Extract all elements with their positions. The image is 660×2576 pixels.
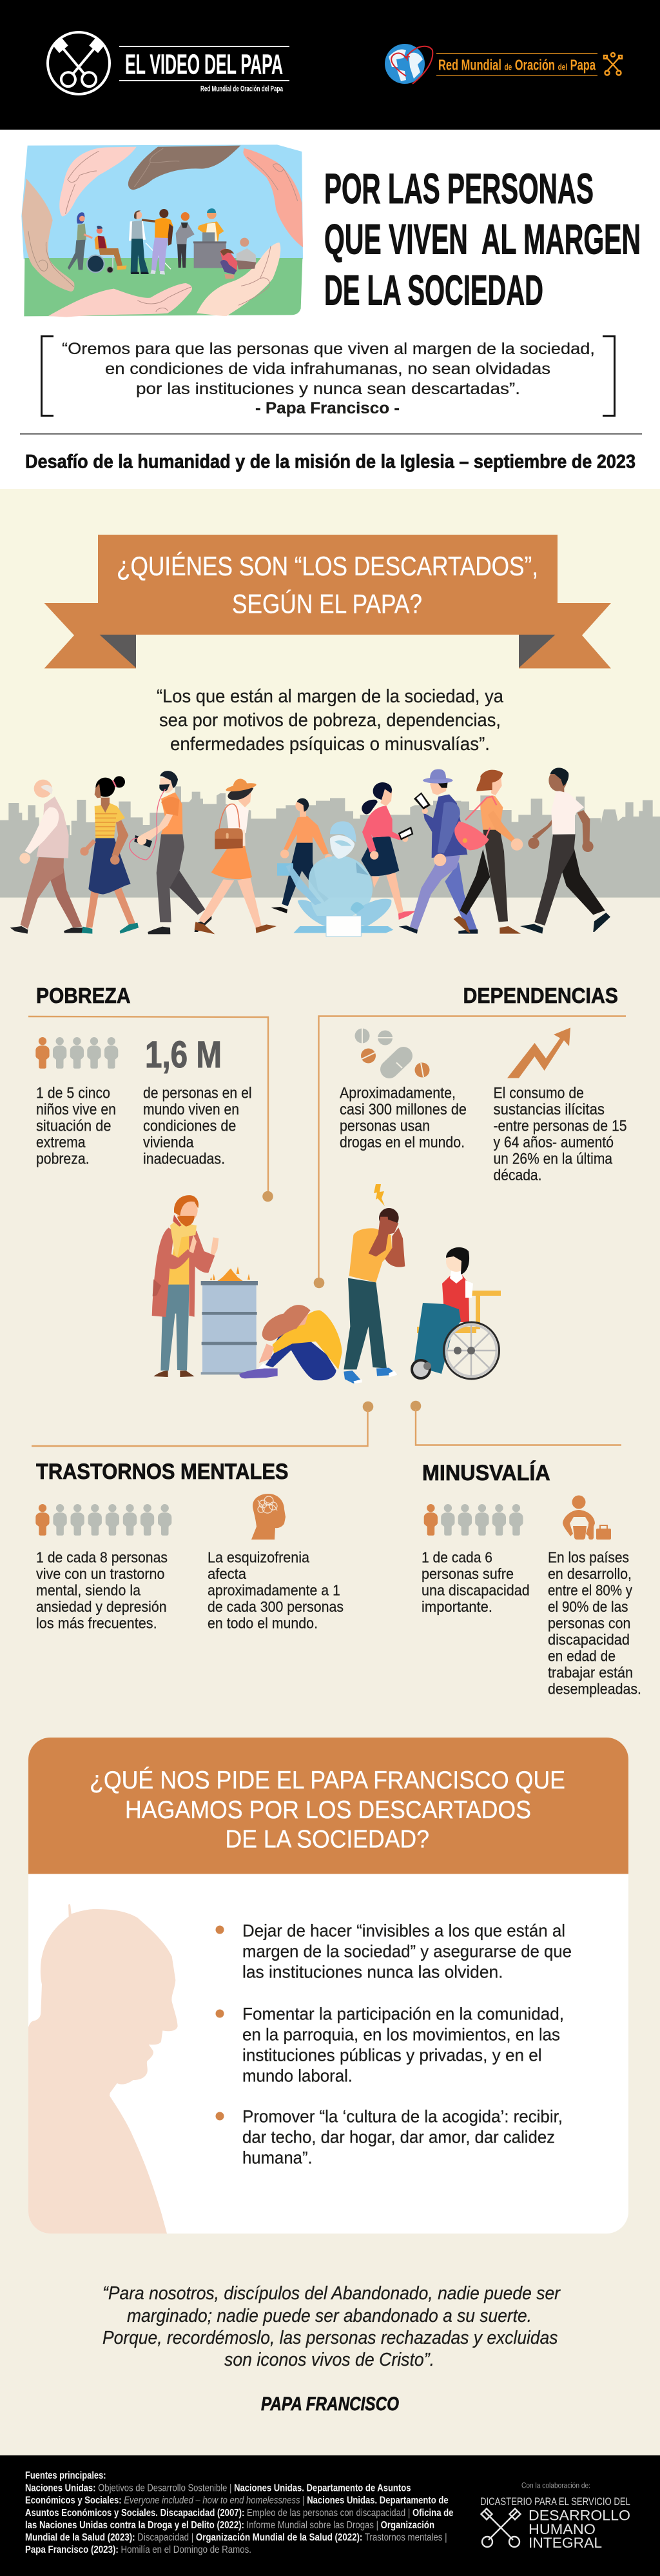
text: unemployment: discapacidad (548, 1631, 630, 1648)
walker: child (271, 798, 333, 913)
collaboration logo: Con la colaboración de: (521, 2481, 590, 2490)
walker: man in white shirt (520, 768, 610, 934)
logo wordmark: Red Mundial de Oración del Papa (200, 84, 283, 93)
bullet 2: Fomentar la participación en la comunidad, (242, 2005, 564, 2024)
text: unemployment: desempleadas. (548, 1681, 641, 1698)
section: Minusvalía (411, 1401, 641, 1698)
text: housing: de personas en el (143, 1085, 252, 1102)
text: housing: vivienda (143, 1134, 194, 1151)
text: 1 in 6: personas sufre (422, 1565, 514, 1582)
bullet 3: humana”. (242, 2148, 313, 2168)
text: unemployment: en edad de (548, 1648, 616, 1665)
bullet 3 (215, 2107, 563, 2168)
bullet 1: Dejar de hacer “invisibles a los que están al (242, 1921, 565, 1940)
quote: who are the discarded: enfermedades psíquicas o minusvalías”. (170, 734, 490, 755)
heading: Pobreza: POBREZA (36, 984, 130, 1007)
text: children in poverty: extrema (36, 1134, 86, 1151)
panel header (28, 1738, 628, 1874)
text: children in poverty (36, 1085, 116, 1168)
panel: what the Pope asks (28, 1738, 628, 2236)
icon: 1 in 6 people (424, 1504, 523, 1536)
connector line: Dependencias (314, 1016, 626, 1288)
text: schizophrenia: La esquizofrenia (208, 1549, 310, 1566)
connector line: Minusvalía (411, 1401, 621, 1445)
quote: who are the discarded: sea por motivos de pobreza, dependencias, (159, 710, 501, 731)
heading: Trastornos mentales: TRASTORNOS MENTALES (36, 1460, 289, 1484)
heading: what the Pope asks: ¿QUÉ NOS PIDE EL PAPA FRANCISCO QUE (90, 1767, 565, 1794)
stat: 1,6 M: 1,6 M (145, 1034, 222, 1076)
text: housing: condiciones de (143, 1118, 236, 1135)
divider (20, 433, 642, 435)
walker: woman with bun (80, 776, 139, 934)
quote: who are the discarded (157, 686, 503, 755)
title (324, 164, 641, 314)
figure: blind man with cane (129, 210, 171, 274)
collaboration logo (480, 2481, 630, 2551)
ribbon heading: ¿QUIÉNES SON “LOS DESCARTADOS”, (117, 551, 538, 581)
logo: El Video del Papa keys (48, 32, 110, 94)
bullet 1 (215, 1921, 572, 1982)
header band (0, 0, 660, 130)
text: 1 in 8: los más frecuentes. (36, 1615, 157, 1632)
text: drug use: Aproximadamente, (340, 1085, 456, 1102)
text: 1 in 8: ansiedad y depresión (36, 1598, 167, 1615)
text: substance use growth: -entre personas de 15 (494, 1118, 626, 1135)
icon: orange keys (604, 53, 622, 75)
text: unemployment: el 90% de las (548, 1598, 628, 1615)
figure: helper in orange (150, 209, 173, 275)
text: schizophrenia: aproximadamente a 1 (208, 1582, 340, 1599)
text: substance use growth: década. (494, 1167, 541, 1184)
hand: top left (59, 147, 137, 217)
text: 1 in 8 (36, 1549, 168, 1632)
connector line: Trastornos (32, 1402, 373, 1446)
section: Trastornos mentales (32, 1402, 373, 1632)
text: children in poverty: 1 de 5 cinco (36, 1085, 110, 1102)
barrel (202, 1285, 257, 1374)
hand: bottom right peach (197, 243, 280, 316)
text: unemployment: trabajar están (548, 1664, 633, 1681)
sources: Papa Francisco (2023): Homilía en el Domingo de Ramos. (25, 2544, 251, 2555)
text: schizophrenia (208, 1549, 344, 1632)
walker: woman with ponytail (361, 782, 416, 920)
sources: las Naciones Unidas contra la Droga y el Delito (2022): Informe Mundial sobre las Drogas | Organización (25, 2520, 434, 2531)
illustration: walkers left (10, 771, 333, 934)
sources: Naciones Unidas: Objetivos de Desarrollo Sostenible | Naciones Unidas. Departamento de Asuntos (25, 2483, 411, 2494)
figure: cook at table (193, 208, 226, 268)
figure: person with plate (176, 212, 195, 268)
page background: cream upper section (0, 489, 660, 898)
text: schizophrenia: en todo el mundo. (208, 1615, 318, 1632)
closing quote: Porque, recordémoslo, las personas rechazadas y excluidas (102, 2328, 558, 2348)
bullet 2: instituciones públicas y privadas, y en el (242, 2046, 542, 2065)
hand: left tan (22, 179, 74, 292)
walker: man with hat and phone (399, 769, 478, 934)
skyline (0, 786, 660, 898)
text: substance use growth (494, 1085, 626, 1184)
sources: Asuntos Económicos y Sociales. Discapacidad (2007): Empleo de las personas con discapacidad | Oficina de (25, 2508, 454, 2519)
text: 1 in 6: importante. (422, 1598, 492, 1615)
text: 1 in 8: 1 de cada 8 personas (36, 1549, 168, 1566)
text: housing: inadecuadas. (143, 1151, 225, 1168)
text: substance use growth: un 26% en la última (494, 1151, 613, 1168)
text: drug use: personas usan (340, 1118, 430, 1135)
text: children in poverty: pobreza. (36, 1151, 89, 1168)
text: unemployment: En los países (548, 1549, 629, 1566)
figure: woman pushing wheelchair (68, 212, 92, 270)
text: 1 in 8: vive con un trastorno (36, 1565, 164, 1582)
silhouette of Pope Francis (28, 1904, 178, 2236)
closing quote: marginado; nadie puede ser abandonado a su suerte. (127, 2306, 532, 2326)
section: Pobreza (28, 984, 273, 1202)
section: Dependencias (314, 984, 626, 1288)
footer band (0, 2455, 660, 2576)
icon: 1 of 5 children (35, 1037, 118, 1069)
ribbon heading (44, 535, 611, 668)
illustration: four people in need (152, 1184, 501, 1383)
illustration: seated blue figure (277, 821, 393, 936)
sources: Mundial de la Salud (2023): Discapacidad | Organización Mundial de la Salud (2022): Trastornos mentales | (25, 2532, 447, 2543)
icon: pills (354, 1028, 429, 1077)
page background: white top (0, 0, 660, 489)
bullet 1: las instituciones nunca las olviden. (242, 1963, 503, 1982)
closing quote: son iconos vivos de Cristo”. (224, 2350, 434, 2370)
bullet 3: Promover “la ‘cultura de la acogida’: recibir, (242, 2107, 563, 2126)
icon: crossed keys (481, 2509, 520, 2547)
connector line: Pobreza (28, 1016, 273, 1202)
closing quote (102, 2283, 561, 2415)
hand: top brown (128, 146, 240, 190)
text: children in poverty: situación de (36, 1118, 111, 1135)
text: 1 in 8: mental, siendo la (36, 1582, 141, 1599)
sources: Fuentes principales: (25, 2470, 106, 2481)
bracket: left (41, 337, 53, 415)
quote with brackets (41, 337, 615, 417)
walker: woman with red bag (454, 770, 523, 934)
figure: man warming at barrel (152, 1195, 258, 1377)
icon: 1 in 8 people (35, 1504, 171, 1536)
text: unemployment: personas con (548, 1615, 630, 1632)
text: housing: mundo viven en (143, 1101, 239, 1118)
icon: rising arrow (507, 1027, 570, 1078)
text: substance use growth: y 64 años- aumentó (494, 1134, 614, 1151)
sources (25, 2470, 454, 2555)
quote with brackets: por las instituciones y nunca sean descartadas”. (136, 380, 520, 398)
walker: old man (10, 780, 82, 934)
heading: what the Pope asks: DE LA SOCIEDAD? (226, 1826, 429, 1854)
figure: man in wheelchair (87, 226, 127, 273)
bullet 3: dar techo, dar hogar, dar amor, dar calidez (242, 2128, 555, 2147)
closing quote: “Para nosotros, discípulos del Abandonado, nadie puede ser (102, 2283, 561, 2304)
icon: person with suitcase (563, 1495, 611, 1540)
text: schizophrenia: de cada 300 personas (208, 1598, 344, 1615)
figure: woman in wheelchair (412, 1247, 501, 1379)
illustration: walkers right (361, 768, 610, 934)
icon: head with tangled mind (251, 1494, 286, 1540)
heading: what the Pope asks: HAGAMOS POR LOS DESCARTADOS (125, 1796, 531, 1824)
hand: right salmon (243, 148, 303, 247)
text: 1 in 6 (422, 1549, 530, 1615)
text: drug use (340, 1085, 467, 1151)
text: substance use growth: sustancias ilícitas (494, 1101, 605, 1118)
text: unemployment: entre el 80% y (548, 1582, 632, 1599)
bullet 2: en la parroquia, en los movimientos, en las (242, 2025, 560, 2045)
walker: bearded man with phone (130, 771, 211, 934)
quote with brackets: en condiciones de vida infrahumanas, no sean olvidadas (105, 360, 550, 378)
fire (210, 1266, 250, 1281)
text: drug use: drogas en el mundo. (340, 1134, 465, 1151)
ribbon heading: SEGÚN EL PAPA? (232, 588, 422, 619)
text: drug use: casi 300 millones de (340, 1101, 467, 1118)
logo: globe and heart (385, 44, 432, 84)
figure: seated woman (239, 1305, 342, 1380)
bullet 2: mundo laboral. (242, 2066, 353, 2086)
text: unemployment: en desarrollo, (548, 1565, 632, 1582)
text: substance use growth: El consumo de (494, 1085, 584, 1102)
text: housing (143, 1085, 252, 1168)
heading: Minusvalía: MINUSVALÍA (422, 1461, 550, 1485)
collaboration logo: HUMANO (529, 2521, 596, 2537)
collaboration logo: INTEGRAL (529, 2535, 602, 2551)
heading: Dependencias: DEPENDENCIAS (463, 984, 618, 1007)
quote attribution: PAPA FRANCISCO (261, 2393, 399, 2415)
logo: Red Mundial de Oración: Red Mundial de Oración del Papa (438, 57, 596, 74)
bullet 1: margen de la sociedad” y asegurarse de que (242, 1941, 572, 1961)
text: unemployment (548, 1549, 641, 1698)
quote with brackets: - Papa Francisco - (255, 399, 400, 417)
figure: seated people (220, 238, 256, 279)
icon: lightning (374, 1184, 385, 1206)
quote with brackets: “Oremos para que las personas que viven al margen de la sociedad, (62, 340, 595, 358)
illustration: hands around people (21, 144, 303, 317)
text: schizophrenia: afecta (208, 1565, 247, 1582)
page background: cream lower section (0, 898, 660, 2455)
sources: Económicos y Sociales: Everyone included – how to end homelessness | Naciones Unidas. Departamento de (25, 2495, 449, 2506)
quote: who are the discarded: “Los que están al margen de la sociedad, ya (157, 686, 503, 707)
walker: woman with hat and bag (195, 778, 277, 934)
figure: man holding head (344, 1208, 405, 1383)
text: 1 in 6: una discapacidad (422, 1582, 530, 1599)
heading: what the Pope asks (90, 1767, 565, 1854)
hand: bottom pink (48, 283, 192, 317)
text: 1 in 6: 1 de cada 6 (422, 1549, 492, 1566)
bullet 2 (215, 2005, 564, 2086)
logo wordmark: EL VIDEO DEL PAPA (125, 49, 283, 80)
text: children in poverty: niños vive en (36, 1101, 116, 1118)
bracket: right (603, 337, 615, 415)
logo wordmark (119, 46, 289, 93)
collaboration logo: DESARROLLO (529, 2508, 630, 2524)
